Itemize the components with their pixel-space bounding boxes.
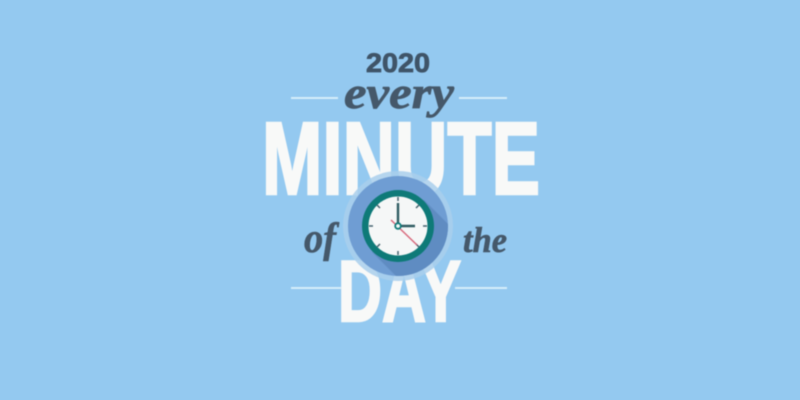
- heading: DAY: DAY: [338, 244, 461, 340]
- rule left of every: [291, 97, 338, 99]
- clock backing disc: [348, 176, 448, 276]
- clock second hand: [391, 220, 417, 245]
- rule right of DAY: [455, 287, 507, 289]
- clock halo: [343, 171, 453, 281]
- clock hour hand: [398, 225, 415, 227]
- rule right of every: [459, 97, 507, 99]
- clock minute hand: [397, 203, 399, 226]
- clock long shadow: [373, 201, 448, 276]
- clock centre pin: [395, 223, 401, 229]
- icon: clock: [343, 170, 453, 282]
- clock face: [368, 196, 428, 256]
- heading: every: every: [344, 67, 455, 118]
- heading: 2020: 2020: [366, 48, 430, 78]
- infographic title graphic: [265, 52, 539, 323]
- heading: MINUTE: MINUTE: [262, 101, 540, 216]
- clock rim: [362, 190, 434, 262]
- heading: of: of: [304, 216, 340, 262]
- heading: the: the: [463, 220, 507, 260]
- clock tick marks: [369, 197, 427, 255]
- rule left of DAY: [291, 287, 341, 289]
